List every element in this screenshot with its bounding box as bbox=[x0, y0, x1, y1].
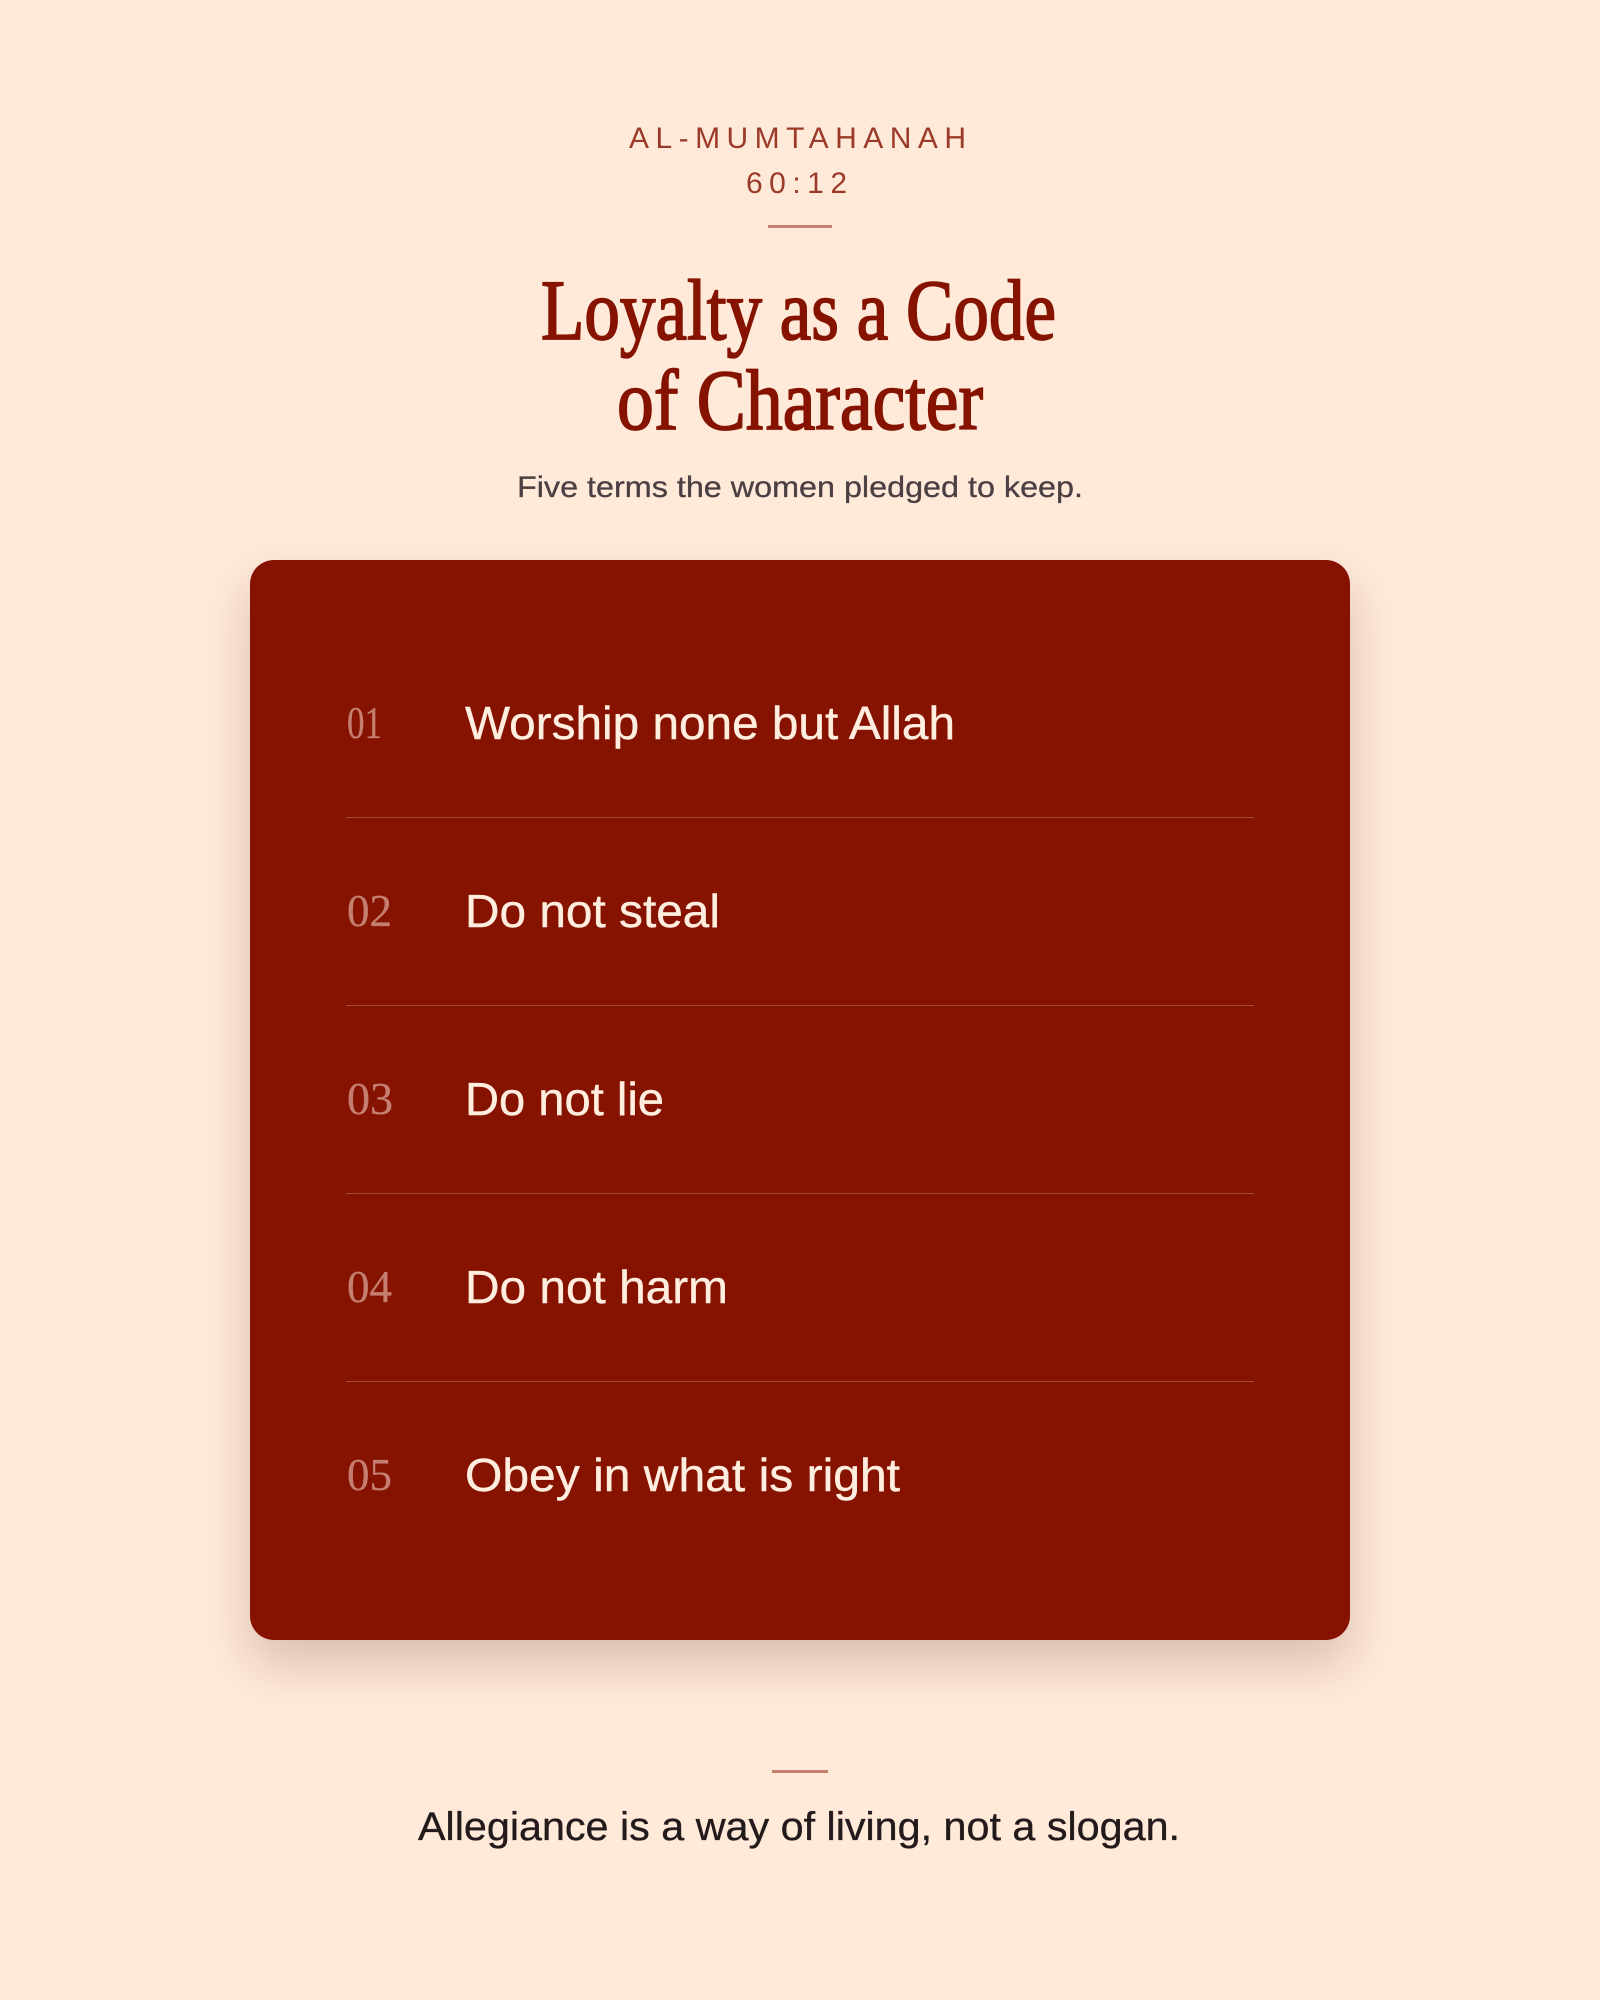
eyebrow: surah reference bbox=[629, 122, 966, 200]
term 04: 04 bbox=[347, 1261, 392, 1312]
term 05: 05 bbox=[347, 1449, 392, 1500]
term 02: 02 bbox=[347, 885, 392, 936]
term 02 bbox=[347, 885, 720, 937]
term list bbox=[346, 697, 1254, 1501]
term 02: Do not steal bbox=[465, 885, 720, 937]
title: of Character bbox=[617, 352, 983, 448]
header rule bbox=[768, 225, 832, 228]
term 05: Obey in what is right bbox=[465, 1449, 900, 1501]
term 03: Do not lie bbox=[465, 1073, 664, 1125]
title: Loyalty as a Code bbox=[541, 262, 1056, 358]
header bbox=[517, 122, 1083, 504]
eyebrow: surah reference: AL-MUMTAHANAH bbox=[629, 122, 966, 155]
closing line: Allegiance is a way of living, not a slogan. bbox=[418, 1805, 1180, 1849]
term 03: 03 bbox=[347, 1073, 393, 1124]
subtitle: Five terms the women pledged to keep. bbox=[517, 471, 1083, 504]
panel: terms card bbox=[250, 560, 1350, 1640]
title bbox=[541, 262, 1056, 448]
term 03 bbox=[347, 1073, 664, 1125]
term 01: 01 bbox=[347, 697, 382, 748]
term 01: Worship none but Allah bbox=[465, 697, 955, 749]
term 04: Do not harm bbox=[465, 1261, 728, 1313]
footer bbox=[418, 1770, 1180, 1849]
term 04 bbox=[347, 1261, 728, 1313]
footer rule bbox=[772, 1770, 828, 1773]
eyebrow: surah reference: 60:12 bbox=[746, 167, 847, 200]
